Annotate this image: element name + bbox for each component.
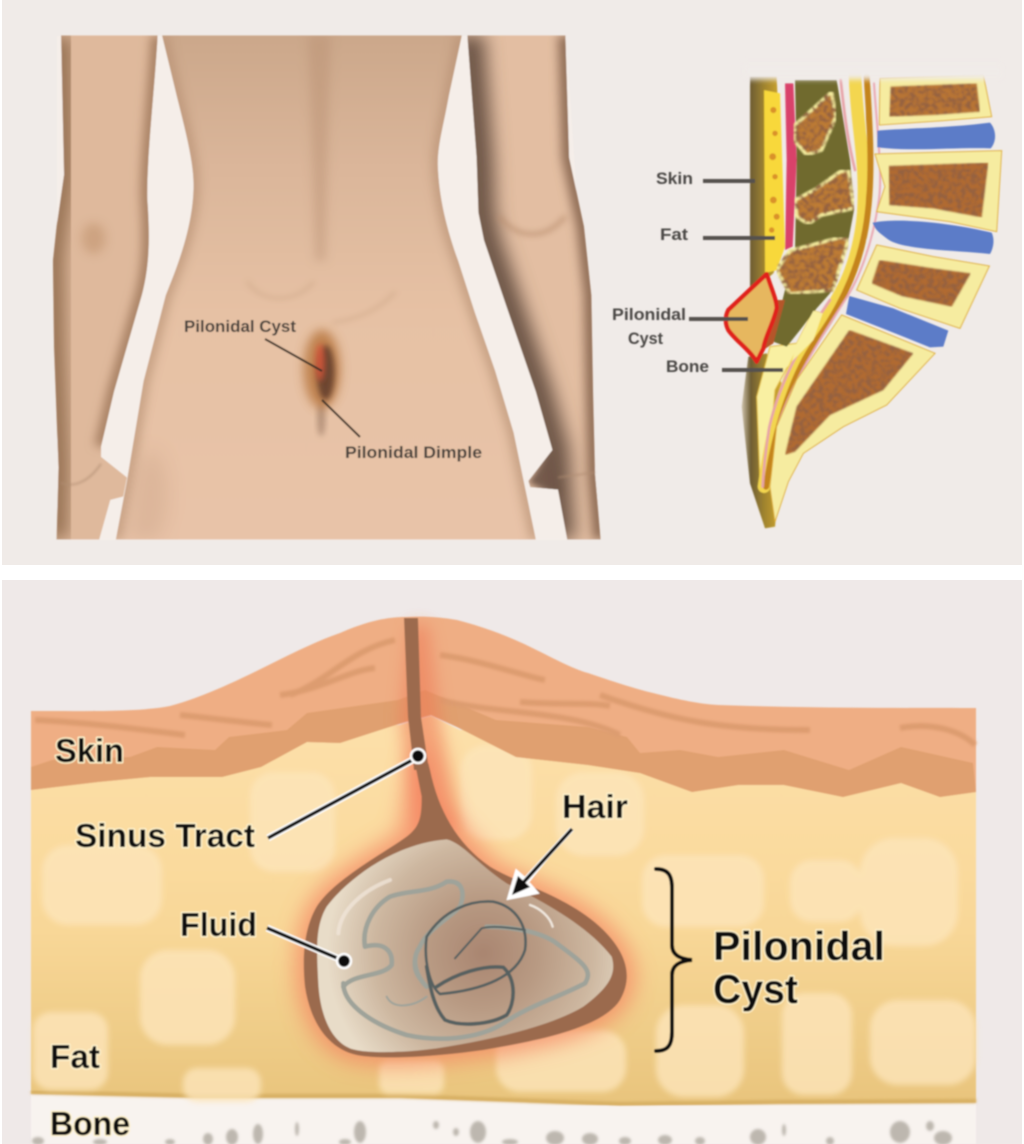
vertebra 2 rim xyxy=(875,151,1002,232)
label: pilonidal cyst line 2: Cyst xyxy=(628,329,663,348)
sacrum core xyxy=(785,330,913,455)
vertebra 1 rim xyxy=(879,75,992,125)
body figure xyxy=(47,34,606,543)
sinus tract xyxy=(404,618,429,770)
connector: skin wall beside cyst xyxy=(763,300,785,350)
light hairs xyxy=(343,882,588,1039)
right elbow xyxy=(499,216,565,234)
torso xyxy=(114,34,540,543)
disc 3 xyxy=(846,296,948,347)
left elbow xyxy=(82,223,105,254)
lower back muscle shading xyxy=(247,281,395,323)
fat lobules xyxy=(33,745,976,1102)
label: fat: Fat xyxy=(660,225,688,244)
skin base xyxy=(31,617,976,797)
arrow halo xyxy=(510,829,572,897)
line: pilonidal cyst xyxy=(689,317,748,321)
spine anatomy xyxy=(726,63,1003,528)
dark hairs xyxy=(426,901,526,1024)
inflammation glow around cyst xyxy=(304,753,627,1057)
olive tissue xyxy=(773,80,854,347)
highlight right xyxy=(530,905,553,927)
leader: fluid xyxy=(267,928,351,968)
pink muscle line xyxy=(785,83,797,250)
fat layer xyxy=(764,90,785,273)
back illustration xyxy=(47,34,606,543)
label: skin: Skin xyxy=(656,169,693,188)
left arm outer shading xyxy=(53,35,64,539)
left arm xyxy=(52,34,158,540)
glow shape xyxy=(304,753,627,1057)
pale bone rib above lower fragment xyxy=(792,311,823,362)
label: fluid: Fluid xyxy=(180,906,257,943)
line: bone xyxy=(722,368,783,372)
vertebra 2 core xyxy=(889,163,988,217)
right arm outer shading xyxy=(565,35,601,539)
fat bottom edge xyxy=(31,1092,976,1104)
arrow: hair xyxy=(510,829,572,897)
dimple shadow xyxy=(317,345,335,400)
label: pilonidal cyst line 1: Pilonidal xyxy=(612,305,686,324)
dark loop xyxy=(426,901,526,994)
label: skin: Skin xyxy=(55,732,124,769)
lower bone fragment xyxy=(757,311,823,487)
label: fat: Fat xyxy=(50,1038,100,1075)
hair strand outer xyxy=(343,927,588,1039)
leader: pilonidal dimple xyxy=(322,400,360,437)
dark strand xyxy=(455,927,525,958)
disc 2 xyxy=(873,221,993,254)
disc 1 xyxy=(877,123,995,149)
cyst wall xyxy=(304,763,627,1057)
leader: sinus tract xyxy=(268,749,425,838)
skin dark band xyxy=(31,690,976,797)
arrow head xyxy=(512,876,530,895)
line: skin xyxy=(703,179,755,183)
vertebra 2 xyxy=(875,151,1002,232)
cyst wall and fill xyxy=(726,274,777,362)
highlight left xyxy=(338,880,390,933)
cyst xyxy=(304,763,627,1057)
dimple redness xyxy=(316,343,325,381)
arrow line xyxy=(522,829,572,884)
dimple halo xyxy=(303,330,340,409)
label: pilonidal: Pilonidal xyxy=(713,923,885,969)
leader dot xyxy=(337,954,351,968)
torso left edge shading xyxy=(116,35,194,539)
torso base xyxy=(114,34,540,543)
leader halo xyxy=(267,928,344,961)
leader dot xyxy=(411,749,425,763)
top fade xyxy=(743,63,1003,79)
canal orange xyxy=(766,77,870,487)
spinous process 1 xyxy=(794,92,836,155)
wrist crease xyxy=(60,464,595,485)
vertebra 1 xyxy=(879,75,992,125)
panel: bottom background xyxy=(2,580,1022,1144)
hip shading xyxy=(132,460,166,538)
right hand shadow xyxy=(528,458,556,488)
hair strand wavy xyxy=(343,882,462,987)
dark coil xyxy=(427,967,513,1024)
right arm inner shading xyxy=(469,35,560,539)
canal pink right edge xyxy=(778,83,880,423)
skin strata xyxy=(35,640,975,745)
leader line xyxy=(268,757,418,838)
leader halo xyxy=(268,757,418,838)
torso right edge shading xyxy=(438,35,536,539)
cyst dimple xyxy=(303,330,340,409)
leader line xyxy=(267,928,344,961)
hair strand thin xyxy=(387,997,427,1005)
sacrum xyxy=(770,315,935,522)
bone speckle xyxy=(32,1121,952,1144)
vertebra 3 rim xyxy=(857,245,989,328)
labels xyxy=(50,732,885,1142)
label: pilonidal dimple: Pilonidal Dimple xyxy=(345,443,482,462)
label: cyst: Cyst xyxy=(713,966,798,1012)
label: sinus tract: Sinus Tract xyxy=(75,817,255,854)
spine cross-section xyxy=(612,63,1003,528)
panel: top background xyxy=(2,0,1022,565)
spinal canal xyxy=(763,75,880,487)
label: bone: Bone xyxy=(50,1105,130,1142)
vertebra 1 core xyxy=(889,83,980,117)
line: fat xyxy=(703,236,775,240)
spine shadow xyxy=(310,37,329,260)
fat dots xyxy=(769,107,780,233)
leader: pilonidal cyst xyxy=(265,339,322,371)
back image backdrop xyxy=(57,36,600,540)
vertebra 3 xyxy=(857,245,989,328)
cyst cross-section diagram xyxy=(31,617,976,1144)
vertebra 3 core xyxy=(872,260,971,307)
spinous process 3 xyxy=(777,237,848,294)
bone layer xyxy=(31,1095,976,1144)
skin strip xyxy=(742,77,787,528)
canal outer yellow xyxy=(764,75,864,487)
spinous process 2 xyxy=(795,170,854,224)
label: hair: Hair xyxy=(562,788,628,825)
fat layer xyxy=(31,716,976,1106)
label: pilonidal cyst: Pilonidal Cyst xyxy=(184,317,296,336)
sacrum rim xyxy=(770,315,935,522)
label: bone: Bone xyxy=(666,357,709,376)
hair strand inner xyxy=(414,933,430,983)
right arm base xyxy=(466,34,606,543)
cleft shadow xyxy=(317,402,325,436)
left arm inner shading xyxy=(101,35,158,447)
brace: pilonidal cyst xyxy=(656,869,692,1051)
canal pink left edge xyxy=(763,80,855,487)
inflammation glow around sinus xyxy=(400,625,462,840)
left arm base xyxy=(52,34,158,540)
cyst fluid xyxy=(317,839,613,1052)
right arm xyxy=(466,34,606,543)
